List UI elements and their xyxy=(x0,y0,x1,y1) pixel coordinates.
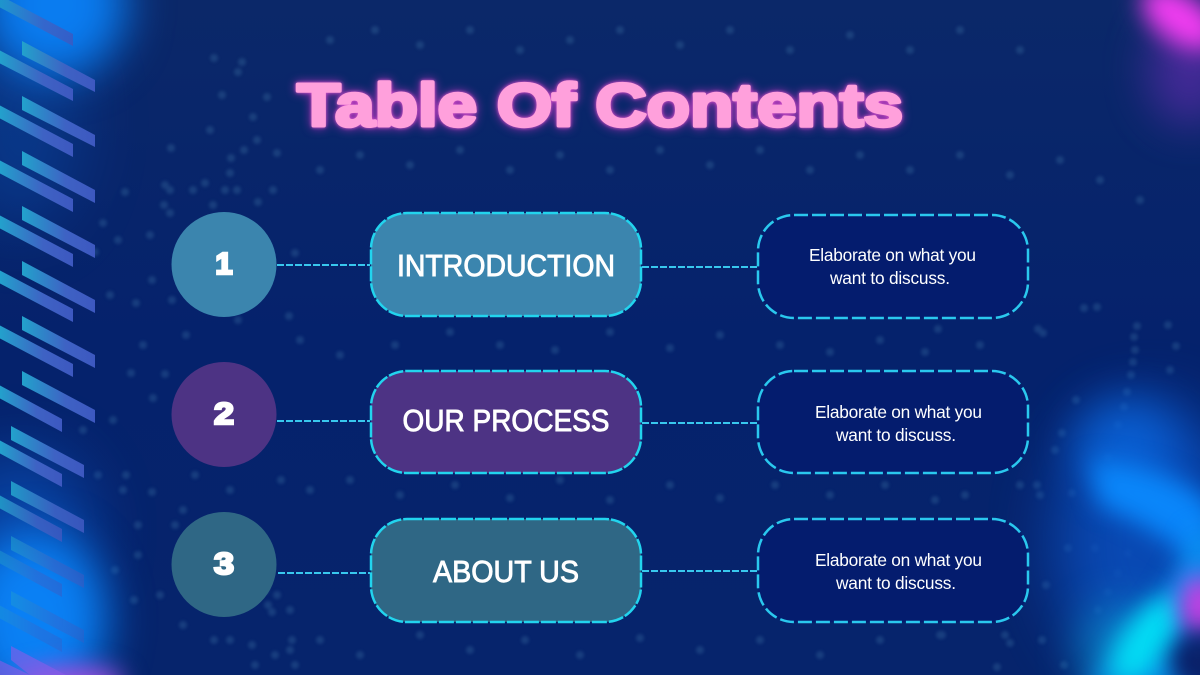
heading pill: our process xyxy=(371,371,641,473)
connector 2b xyxy=(642,422,757,424)
description box 1 xyxy=(758,215,1028,318)
description box 3: want to discuss. xyxy=(835,573,956,593)
row 2 xyxy=(172,362,1028,473)
description box 2: Elaborate on what you xyxy=(815,402,982,422)
row 1 xyxy=(172,212,1028,318)
description box 2 xyxy=(758,371,1028,473)
heading pill: our process: OUR PROCESS xyxy=(402,403,610,438)
glow: top-left blue xyxy=(0,0,127,230)
title: Table Of Contents xyxy=(297,72,903,139)
glow: bottom-right blue, cyan and magenta xyxy=(1055,400,1200,675)
connector 2a xyxy=(277,420,370,422)
connector 1b xyxy=(642,266,757,268)
glow: bottom-left blue and violet xyxy=(0,450,125,675)
glow: top-right magenta xyxy=(1130,0,1200,125)
number circle 2: 2 xyxy=(214,396,234,431)
number circle 1: 1 xyxy=(215,246,233,281)
connector 3a xyxy=(278,572,370,574)
row 3 xyxy=(172,512,1028,622)
decorative stripes: left edge xyxy=(0,0,95,675)
heading pill: about us: ABOUT US xyxy=(433,554,579,589)
heading pill: introduction: INTRODUCTION xyxy=(397,248,615,283)
description box 1: want to discuss. xyxy=(829,268,950,288)
heading pill: about us xyxy=(371,519,641,622)
description box 3: Elaborate on what you xyxy=(815,550,982,570)
number circle 1 xyxy=(172,212,276,317)
connector 3b xyxy=(642,570,757,572)
description box 1: Elaborate on what you xyxy=(809,245,976,265)
description box 3 xyxy=(758,519,1028,622)
heading pill: introduction xyxy=(371,213,641,316)
connector 1a xyxy=(277,264,370,266)
number circle 3: 3 xyxy=(214,546,234,581)
description box 2: want to discuss. xyxy=(835,425,956,445)
number circle 2 xyxy=(172,362,276,467)
number circle 3 xyxy=(172,512,276,617)
